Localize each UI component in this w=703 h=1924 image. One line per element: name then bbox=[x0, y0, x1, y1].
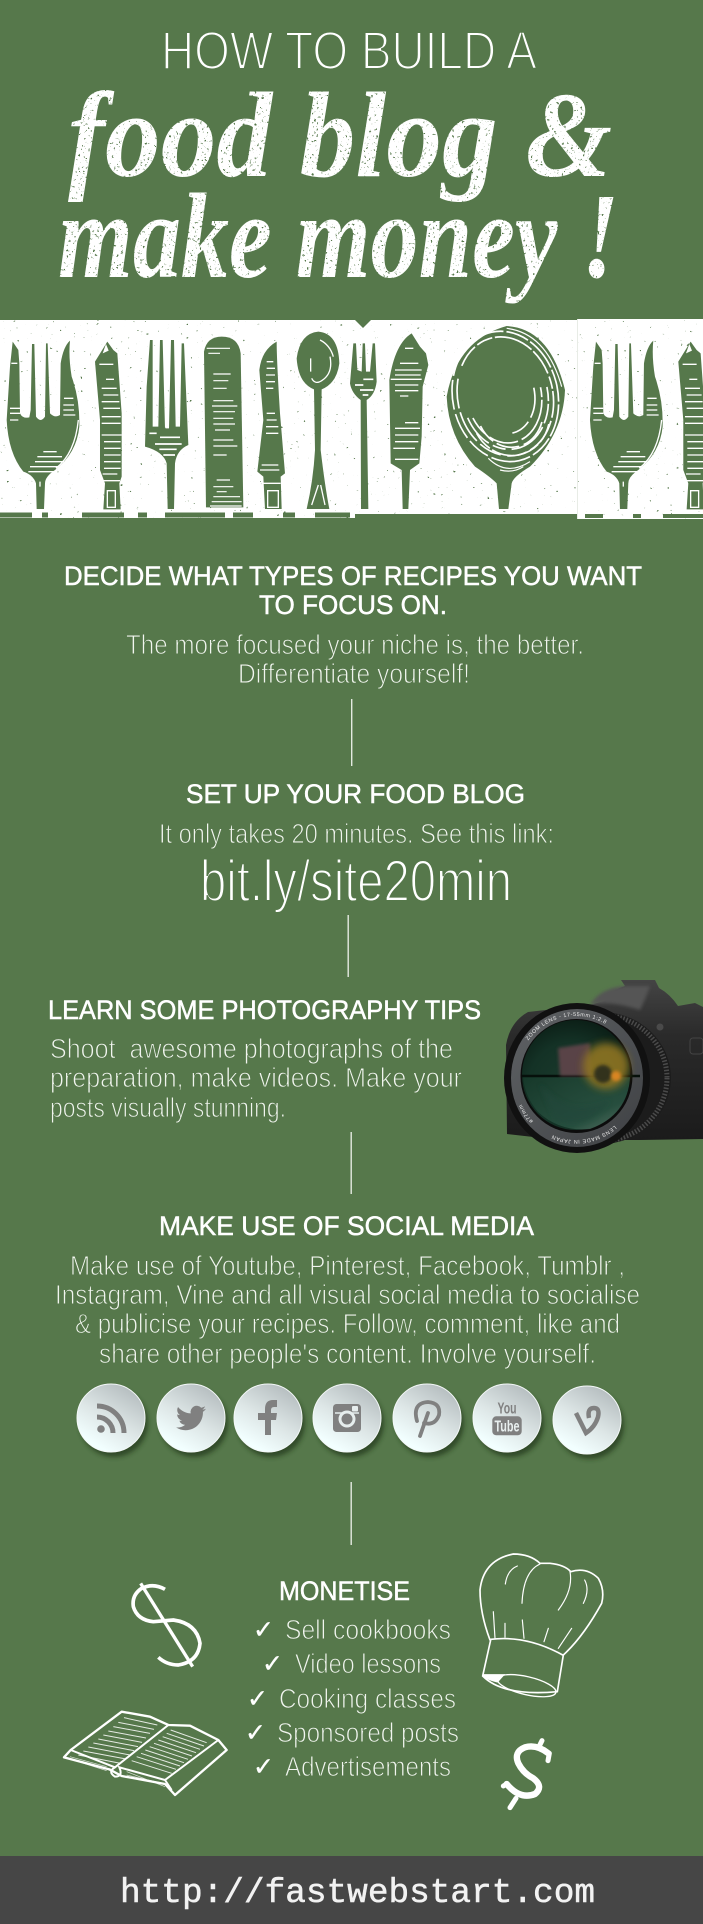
icon: facebook bbox=[234, 1384, 305, 1457]
icon: vine bbox=[553, 1386, 624, 1459]
list item: sponsored posts: Sponsored posts bbox=[277, 1717, 459, 1748]
lens barrel bbox=[531, 1012, 671, 1144]
icon: small fork bbox=[350, 343, 377, 509]
list item: cooking classes: ✓ bbox=[247, 1684, 268, 1713]
icon: rss bbox=[77, 1384, 148, 1457]
lens glass bbox=[522, 1020, 640, 1130]
footer url: http://fastwebstart.com bbox=[120, 1874, 595, 1913]
icon: table knife bbox=[95, 342, 122, 509]
lens front ring bbox=[504, 1003, 650, 1153]
body text: & publicise your recipes. Follow, comment, like and bbox=[75, 1308, 620, 1339]
title block bbox=[58, 21, 619, 304]
icon: repeated fork and knife bbox=[590, 341, 703, 509]
body text: posts visually stunning. bbox=[50, 1092, 286, 1123]
heading: LEARN SOME PHOTOGRAPHY TIPS bbox=[48, 995, 481, 1025]
icon: teaspoon bbox=[297, 332, 339, 509]
list item: sell cookbooks: Sell cookbooks bbox=[285, 1614, 451, 1645]
cutlery banner bbox=[0, 319, 703, 525]
icon: youtube: You bbox=[498, 1400, 516, 1418]
icon: long knife bbox=[204, 337, 243, 507]
icon: twitter bbox=[157, 1384, 228, 1457]
icon: pinterest bbox=[393, 1384, 464, 1457]
icon: broad fork bbox=[7, 341, 79, 509]
lens ring lettering: ZOOM LENS - 17-55mm 1:2.8 bbox=[526, 1012, 606, 1040]
icon: chef hat bbox=[480, 1554, 603, 1701]
icon: small knife bbox=[257, 342, 285, 509]
section: monetise bbox=[245, 1576, 459, 1782]
body text: The more focused your niche is, the better. bbox=[126, 629, 584, 660]
icon: bold dollar sign bbox=[503, 1741, 549, 1808]
heading second line: TO FOCUS ON. bbox=[259, 590, 447, 620]
body text bbox=[55, 1250, 640, 1369]
icon: youtube bbox=[473, 1384, 544, 1457]
lens ring lettering: LENS MADE IN JAPAN bbox=[552, 1126, 617, 1144]
title script: food blog and make money: food blog & bbox=[68, 68, 612, 203]
body text: Instagram, Vine and all visual social media to socialise bbox=[55, 1279, 640, 1310]
step: set up blog bbox=[159, 779, 554, 914]
heading: MONETISE bbox=[279, 1576, 410, 1606]
body text: share other people's content. Involve yourself. bbox=[99, 1338, 596, 1369]
body text: It only takes 20 minutes. See this link: bbox=[159, 818, 554, 849]
photo: camera bbox=[504, 980, 703, 1153]
title: how to build a: HOW TO BUILD A bbox=[161, 21, 537, 81]
list item: sponsored posts: ✓ bbox=[245, 1718, 266, 1747]
list item: video lessons: Video lessons bbox=[295, 1648, 441, 1679]
list item: advertisements: Advertisements bbox=[285, 1751, 451, 1782]
icon: butter knife bbox=[389, 333, 428, 509]
body text: preparation, make videos. Make your bbox=[50, 1062, 462, 1093]
title script: food blog and make money bbox=[58, 68, 619, 304]
body text: Make use of Youtube, Pinterest, Facebook, Tumblr , bbox=[70, 1250, 625, 1281]
icon: thin dollar sign bbox=[133, 1583, 200, 1667]
list item: sell cookbooks: ✓ bbox=[253, 1615, 274, 1644]
step: photography bbox=[48, 995, 481, 1123]
heading: DECIDE WHAT TYPES OF RECIPES YOU WANT bbox=[64, 561, 642, 591]
icon: big spoon bbox=[440, 321, 570, 509]
heading: SET UP YOUR FOOD BLOG bbox=[186, 779, 525, 809]
list item: video lessons: ✓ bbox=[262, 1649, 283, 1678]
step: decide recipes bbox=[64, 561, 642, 689]
list item: cooking classes: Cooking classes bbox=[279, 1683, 456, 1714]
body text: Shoot awesome photographs of the bbox=[50, 1033, 453, 1064]
lens ring lettering: ø77mm bbox=[519, 1104, 533, 1122]
camera body bbox=[506, 980, 703, 1140]
social media icons bbox=[77, 1384, 624, 1459]
list item: advertisements: ✓ bbox=[253, 1752, 274, 1781]
icon: open book bbox=[64, 1712, 227, 1795]
icon: dinner fork bbox=[145, 340, 188, 509]
link: bit.ly/site20min bbox=[200, 849, 512, 914]
footer bar bbox=[0, 1856, 703, 1924]
body text bbox=[50, 1033, 462, 1123]
lens ring lettering bbox=[519, 1012, 617, 1144]
heading: MAKE USE OF SOCIAL MEDIA bbox=[159, 1211, 534, 1241]
icon: instagram bbox=[313, 1384, 384, 1457]
body text second line: Differentiate yourself! bbox=[238, 658, 470, 689]
step: social media bbox=[55, 1211, 640, 1369]
icon: youtube: Tube bbox=[494, 1418, 520, 1436]
